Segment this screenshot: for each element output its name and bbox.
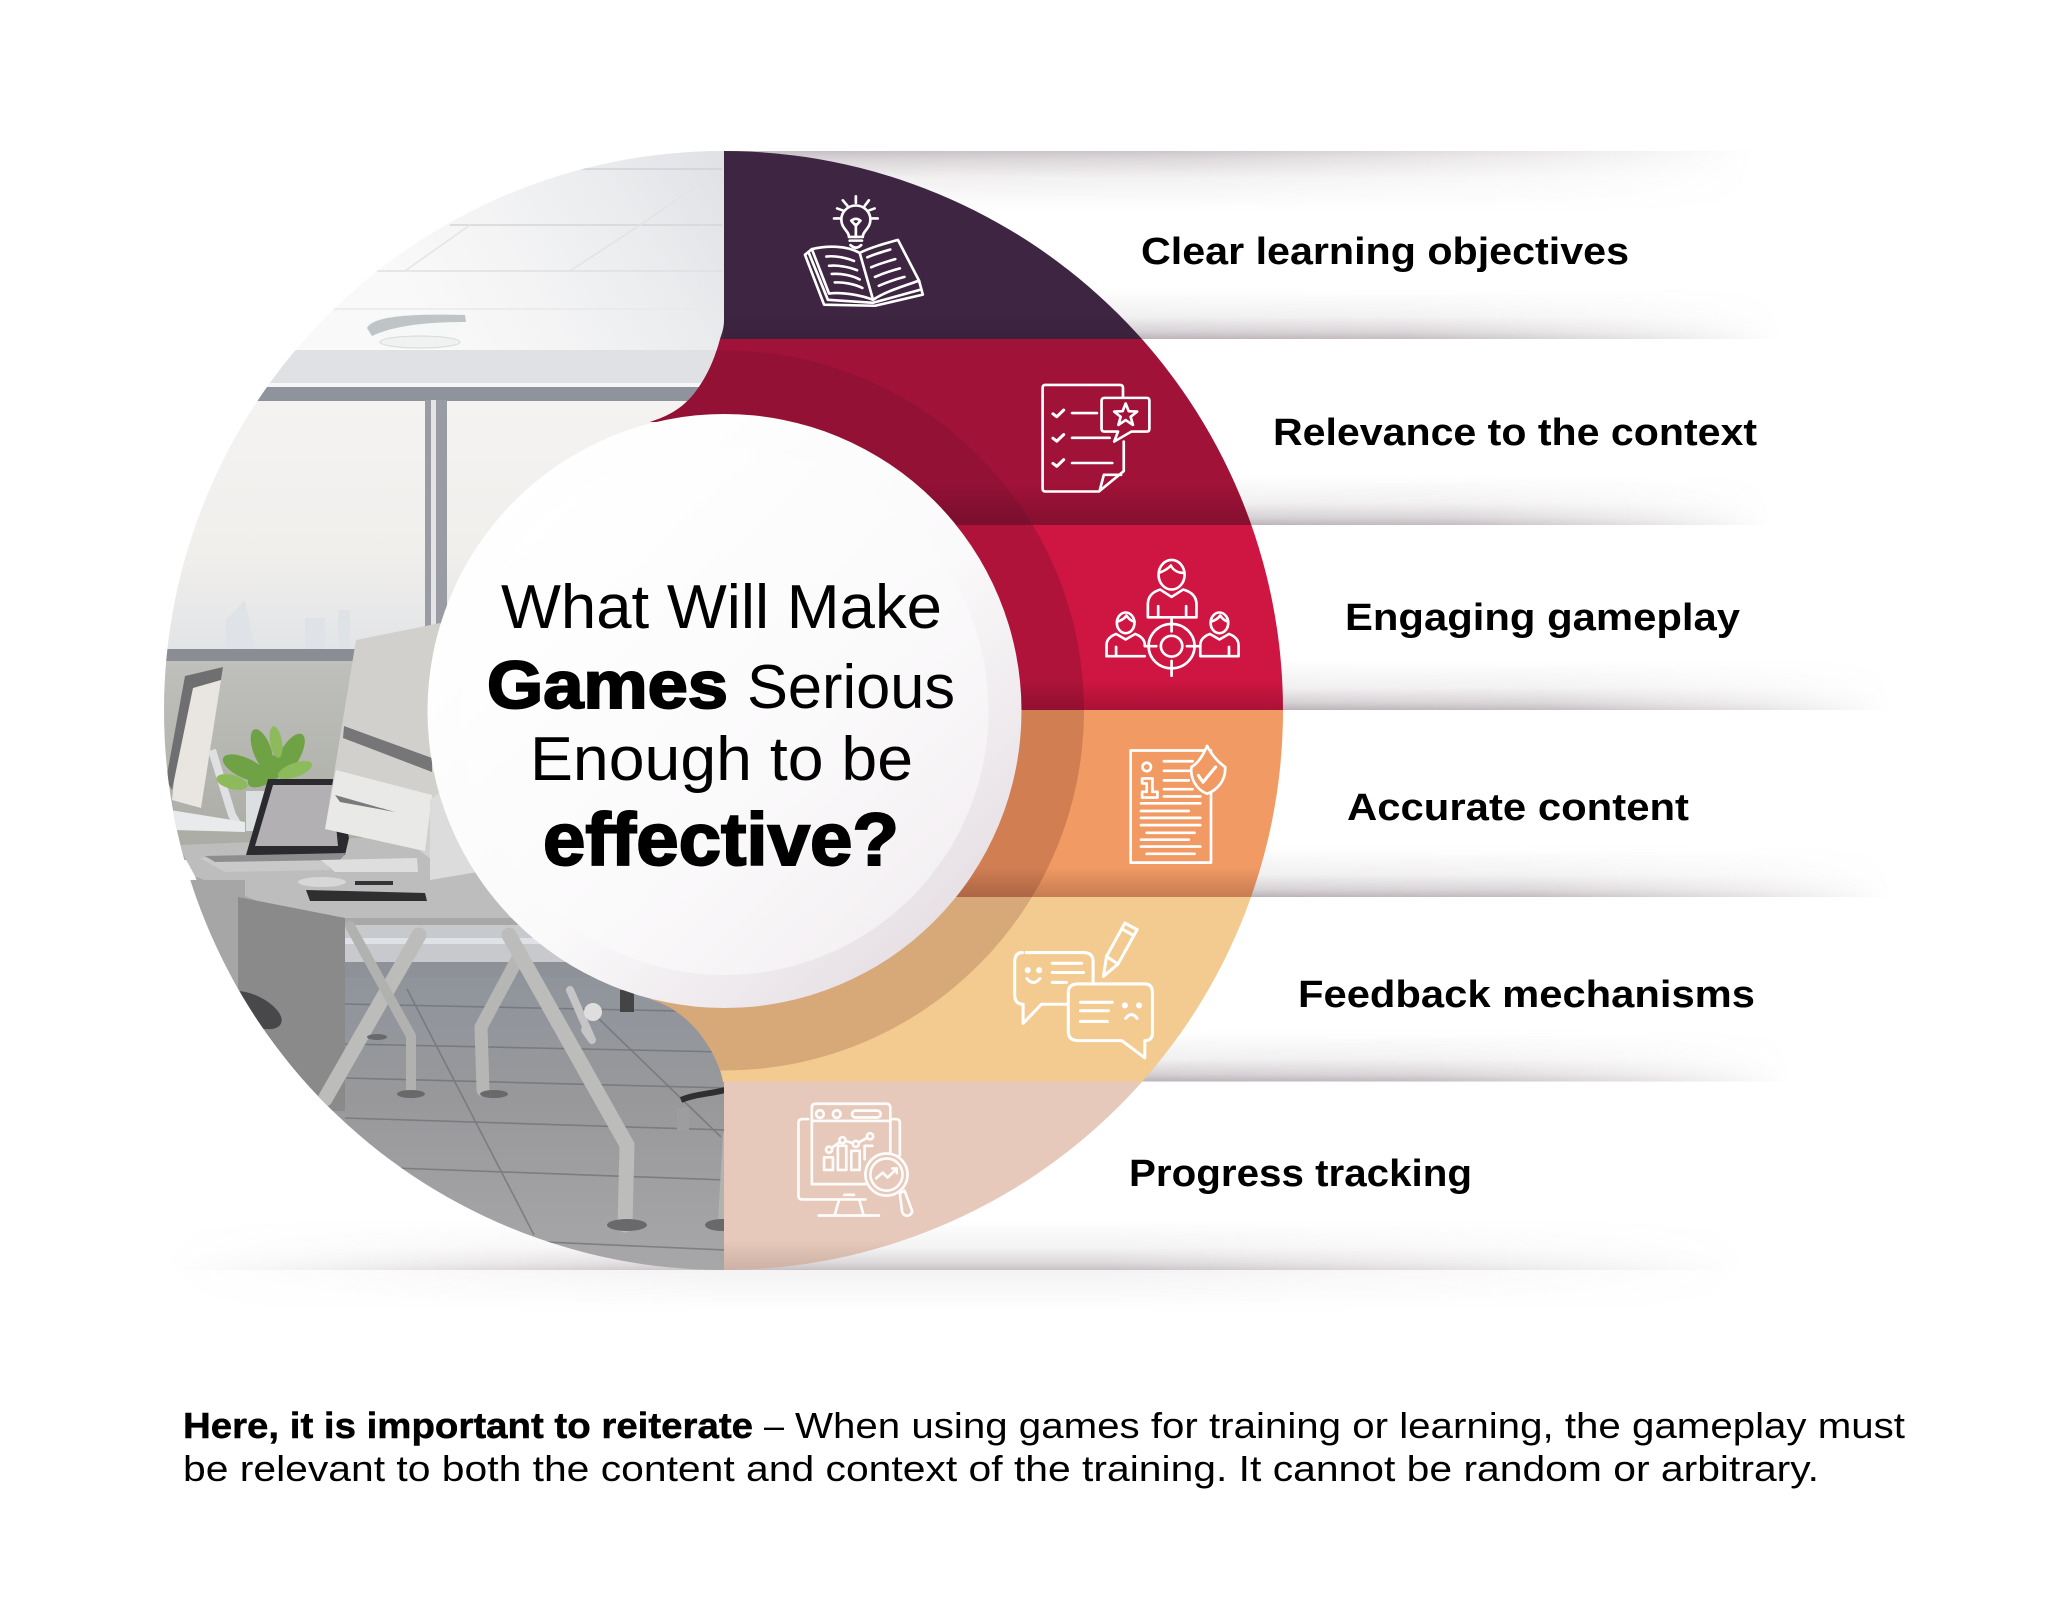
footer note (183, 1405, 1905, 1489)
segment: engaging gameplay (956, 525, 1283, 710)
band shadows (165, 151, 1890, 1310)
central heading (487, 573, 955, 881)
inner disc (460, 447, 988, 975)
label: accurate content: Accurate content (1347, 787, 1689, 829)
central heading: Games (487, 648, 728, 723)
central heading: What Will Make (501, 573, 942, 642)
label: engaging gameplay: Engaging gameplay (1345, 597, 1740, 639)
central heading: Serious (747, 653, 955, 722)
table legs (325, 926, 727, 1225)
desk side panel (190, 880, 345, 1111)
panel: office photo in left half of circle (150, 140, 739, 1277)
segment: feedback mechanisms (650, 897, 1251, 1082)
floor (200, 977, 725, 1277)
plant (215, 725, 314, 831)
segment: accurate content (956, 710, 1283, 897)
icon: document with info and shield (1131, 746, 1225, 863)
label: progress tracking: Progress tracking (1129, 1153, 1472, 1195)
floor tile lines (345, 989, 725, 1250)
segment: progress tracking (724, 1082, 1142, 1270)
label: clear learning objectives: Clear learning objectives (1141, 231, 1629, 273)
office chair base (584, 990, 725, 1130)
outer disc (428, 414, 1022, 1008)
centre circle with question (428, 414, 1022, 1008)
panel: coloured segments (650, 151, 1283, 1270)
table feet (367, 1034, 739, 1231)
trees backdrop (164, 660, 364, 860)
label: relevance to the context: Relevance to the context (1273, 412, 1757, 454)
ceiling (333, 151, 724, 350)
central heading: effective? (543, 798, 899, 881)
window mullion (425, 400, 447, 645)
window (168, 401, 687, 649)
icon: feedback speech bubbles and pencil (1015, 923, 1152, 1058)
footer note: Here, it is important to reiterate (183, 1405, 753, 1446)
segment: clear learning objectives (720, 151, 1142, 339)
footer note: – (764, 1405, 784, 1446)
footer note: be relevant to both the content and context of the training. It cannot be random or arbitrary. (183, 1448, 1819, 1489)
ceiling light fixture (367, 314, 466, 348)
window rail (166, 649, 354, 661)
ceiling beam (258, 350, 716, 401)
icon: team around target (1107, 560, 1239, 676)
large monitor (325, 623, 476, 880)
segment: relevance to the context (650, 339, 1252, 525)
desk surface (180, 838, 518, 925)
central heading: Enough to be (530, 725, 913, 794)
icon: lightbulb and open book (805, 196, 923, 306)
icon: checklist with star bubble (1043, 385, 1149, 492)
icon: dashboard monitor with magnifier (798, 1104, 912, 1216)
keyboards and mouse (298, 858, 427, 901)
laptop (205, 779, 349, 862)
city skyline (230, 600, 350, 616)
left monitor (166, 667, 245, 832)
wall behind desk (345, 925, 592, 977)
label: feedback mechanisms: Feedback mechanisms (1298, 974, 1755, 1016)
footer note: When using games for training or learning, the gameplay must (795, 1405, 1905, 1446)
